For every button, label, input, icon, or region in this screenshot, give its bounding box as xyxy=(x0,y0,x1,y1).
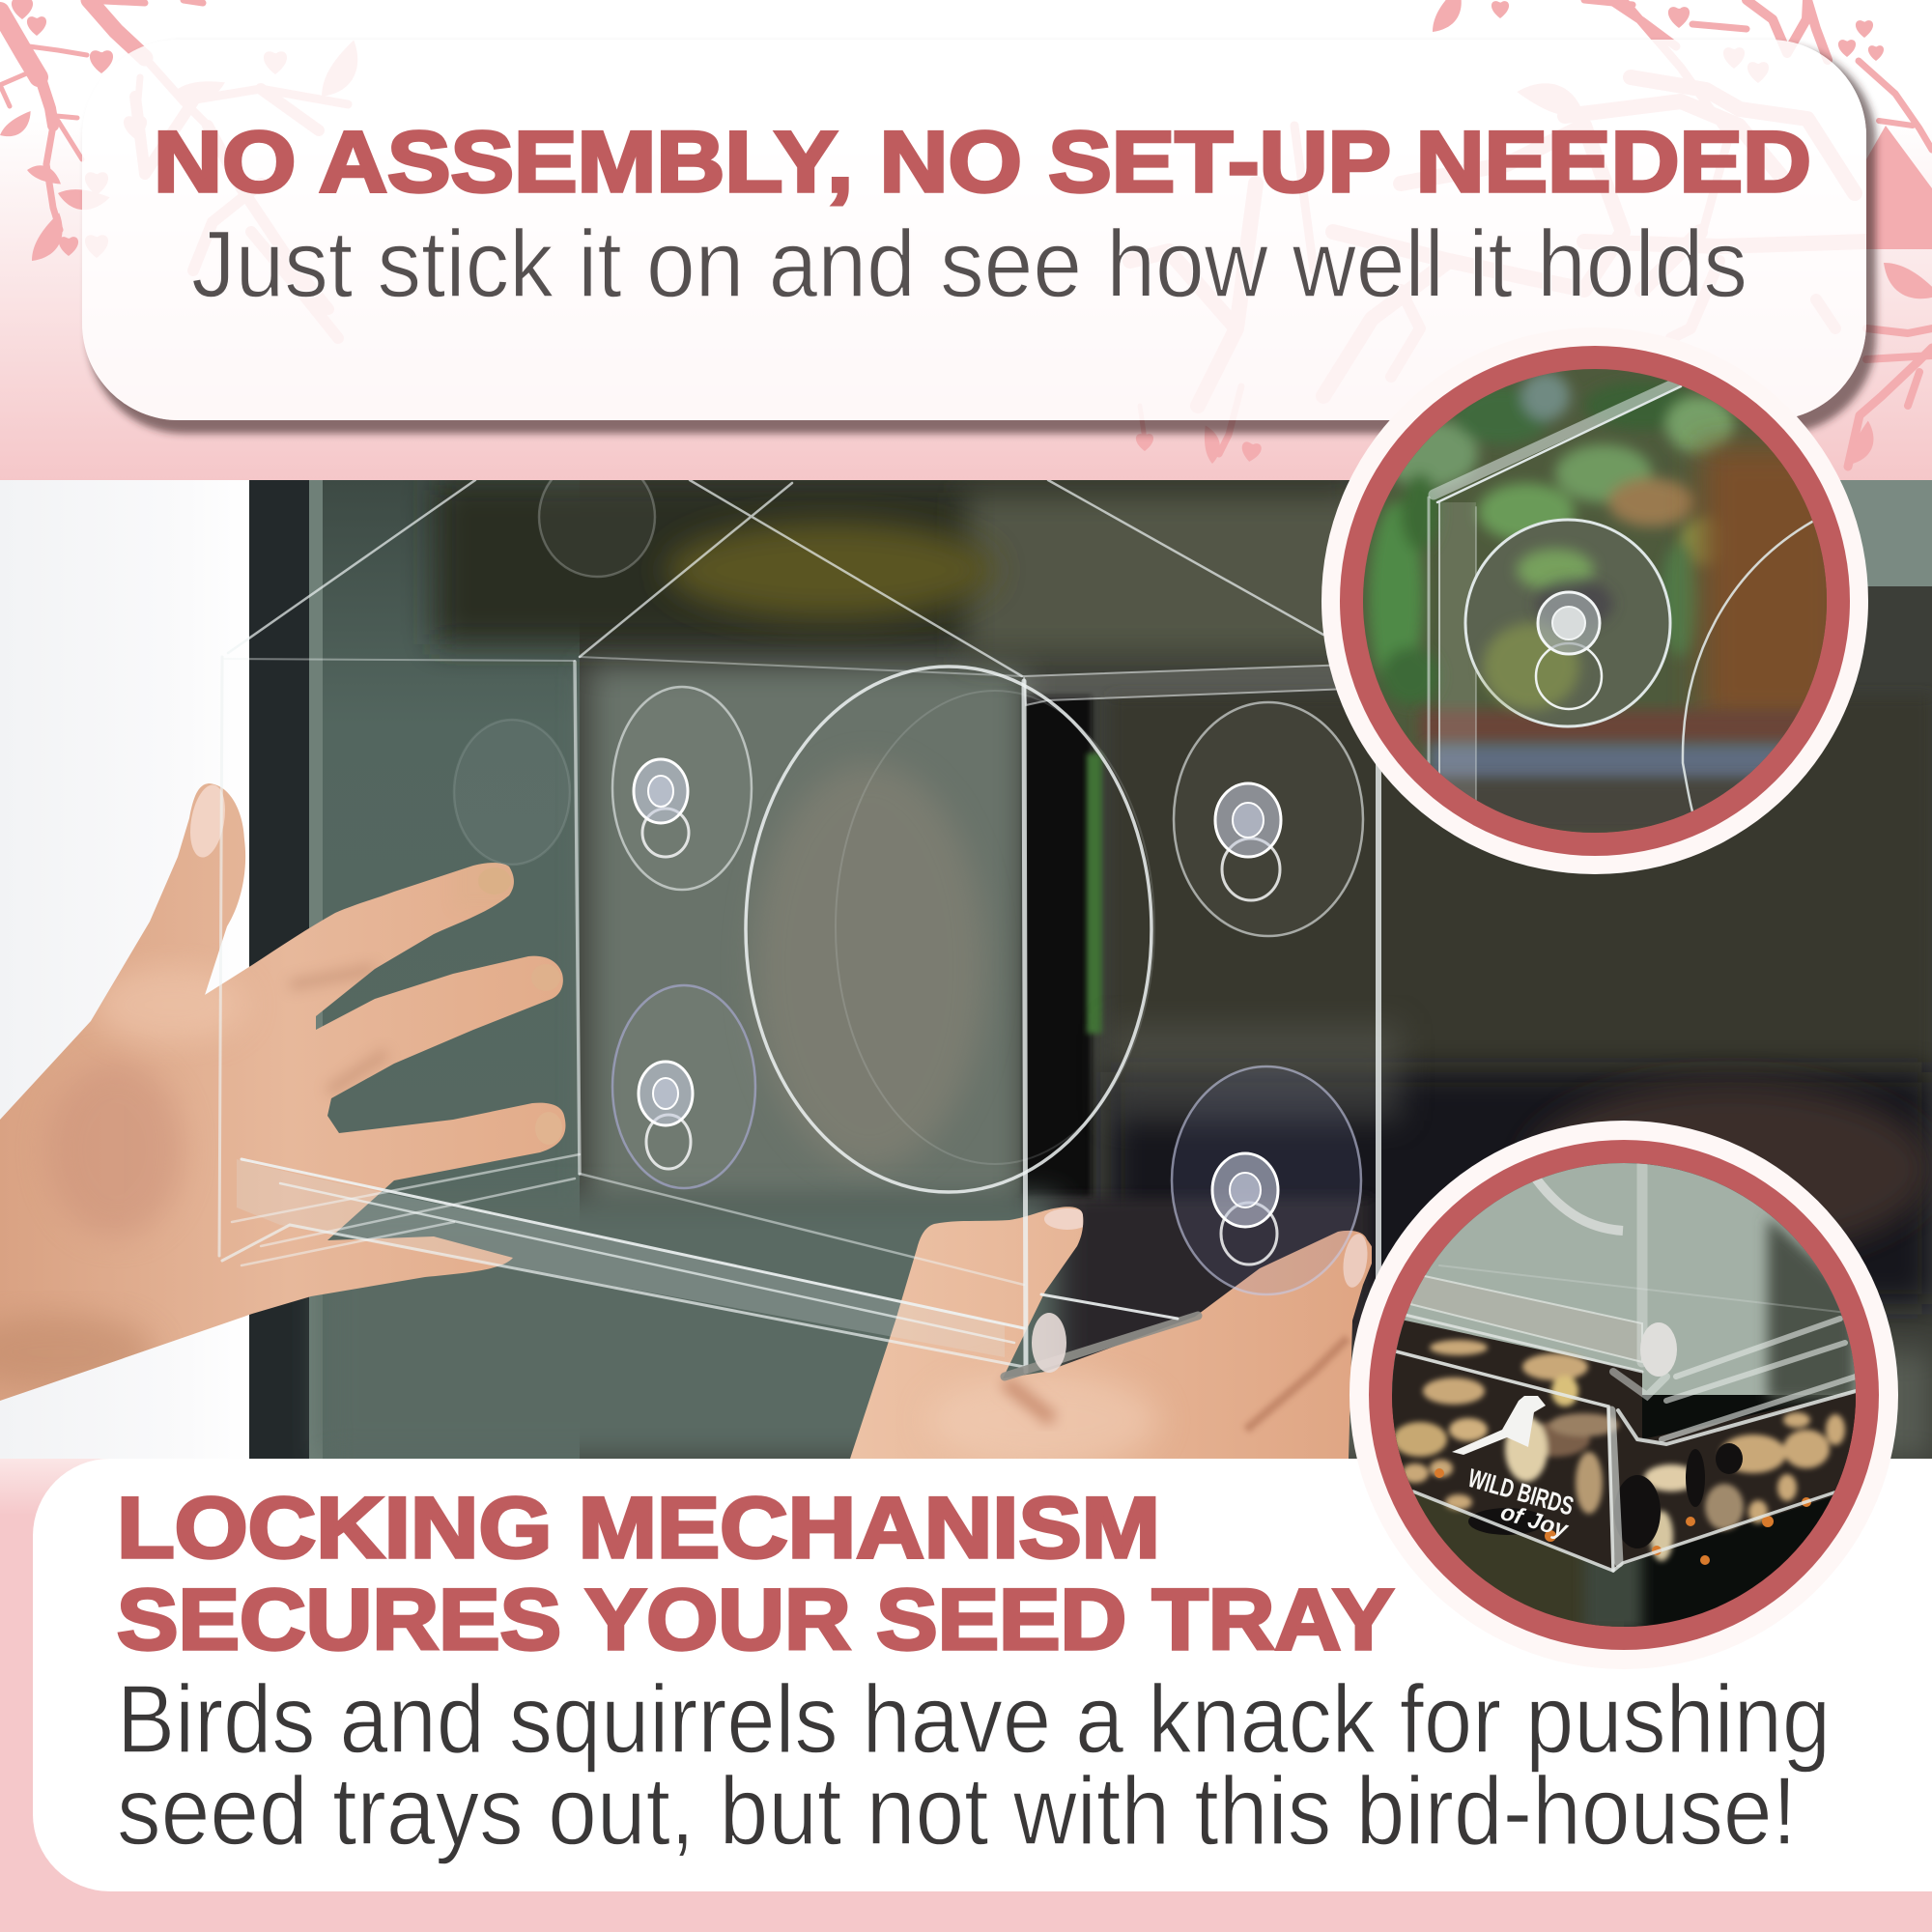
acrylic corner edge xyxy=(1429,379,1812,816)
window background xyxy=(249,480,1932,1459)
heading: secures your seed tray: SECURES YOUR SEED TRAY xyxy=(117,1571,1394,1667)
cherry branch decoration xyxy=(0,0,1932,467)
panel: bottom text card xyxy=(33,1459,1932,1891)
body text line two: seed trays out, but not with this bird-house! xyxy=(117,1757,1797,1865)
acrylic tray rails xyxy=(1396,1163,1856,1571)
suction cups xyxy=(454,457,1363,1294)
left hand xyxy=(0,773,580,1410)
logo on tray: brand text xyxy=(1469,1468,1574,1539)
clear acrylic feeder xyxy=(219,457,1378,1377)
suction cup nubs and rings xyxy=(642,809,1280,1264)
callout circle: seed tray lock close-up xyxy=(1350,1121,1898,1669)
lower front rail and peg line xyxy=(1005,1316,1198,1377)
logo on tray: brand text: of Joy xyxy=(1497,1499,1572,1544)
white window frame xyxy=(0,480,116,1459)
cherry branch large leaves and hearts xyxy=(0,0,1932,466)
subheading: Just stick it on and see how well it holds xyxy=(191,211,1747,317)
callout circle: suction cup close-up xyxy=(1321,327,1868,874)
right hand xyxy=(850,1207,1372,1459)
tray rail xyxy=(224,1157,1024,1348)
main photo: hands placing clear feeder on window xyxy=(0,457,1932,1468)
panel shadow: top panel xyxy=(88,45,1876,434)
lock peg xyxy=(1032,1313,1066,1373)
logo on tray: brand text: WILD BIRDS xyxy=(1464,1463,1577,1521)
top pink gradient background xyxy=(0,0,1932,480)
heading: locking mechanism: LOCKING MECHANISM xyxy=(117,1479,1160,1576)
bottom pink background xyxy=(0,1459,1932,1932)
seed mix xyxy=(1392,1318,1860,1571)
logo on tray: bird xyxy=(1452,1396,1546,1455)
suction cup xyxy=(1465,520,1670,726)
large round opening xyxy=(746,667,1151,1192)
heading: no assembly: NO ASSEMBLY, NO SET-UP NEEDED xyxy=(154,113,1811,210)
lock peg xyxy=(1640,1322,1677,1377)
roof and walls xyxy=(228,480,1323,676)
panel: top heading card xyxy=(82,40,1866,420)
